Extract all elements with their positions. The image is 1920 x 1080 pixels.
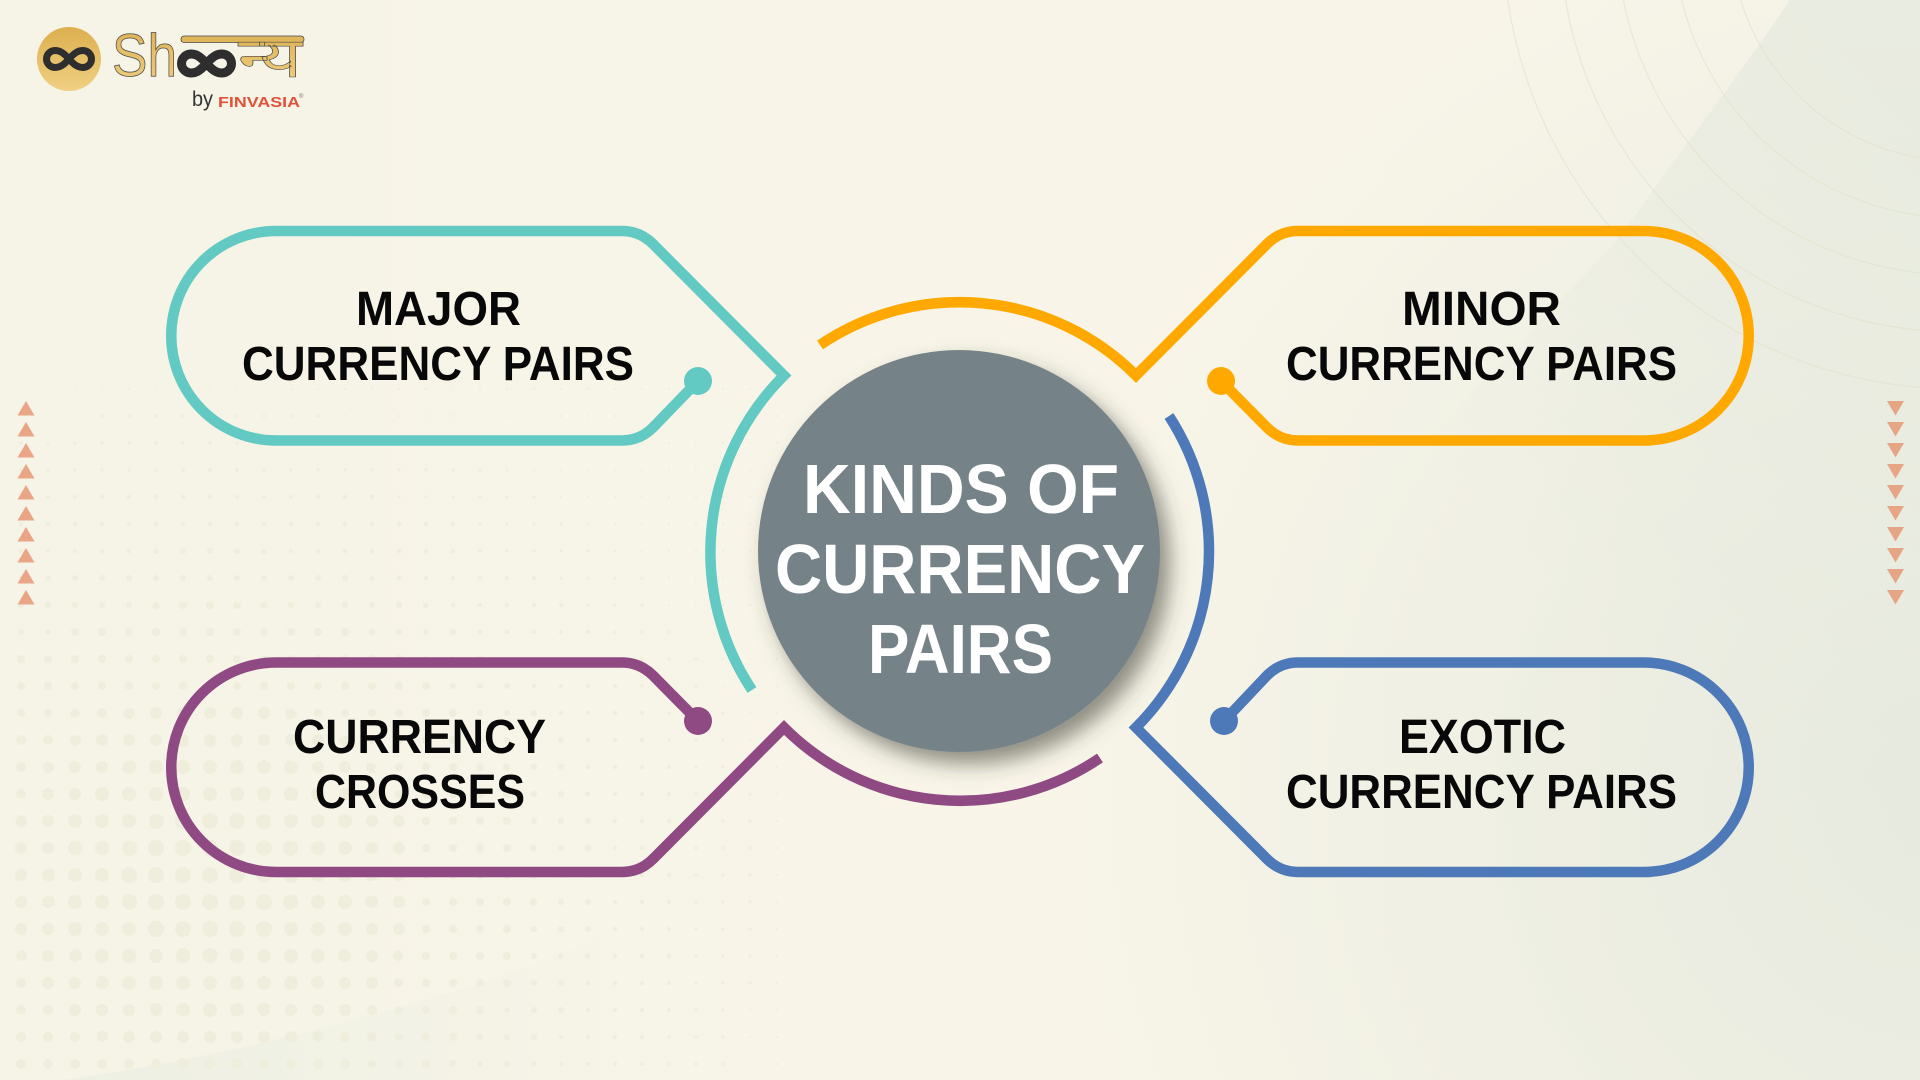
icon: gold infinity badge: [37, 27, 101, 91]
orange dot: [1207, 367, 1235, 395]
label: currency crosses: CROSSES: [315, 766, 525, 819]
logo wordmark: Sh: [112, 22, 177, 89]
central title: KINDS OF: [803, 450, 1119, 528]
central title: CURRENCY: [775, 530, 1145, 608]
purple outline: [171, 662, 1100, 872]
label: major currency pairs: CURRENCY PAIRS: [242, 338, 634, 391]
central title: [775, 450, 1145, 688]
label: minor currency pairs: CURRENCY PAIRS: [1286, 338, 1677, 391]
blue dot: [1210, 707, 1238, 735]
decoration: right triangles pointing down: [1887, 401, 1904, 604]
label: exotic currency pairs: EXOTIC: [1399, 711, 1566, 764]
blue outline: [1136, 416, 1749, 872]
panel: major currency pairs: [171, 231, 784, 690]
logo wordmark: [112, 22, 304, 89]
logo tagline: FINVASIA: [218, 94, 300, 111]
label: exotic currency pairs: [1286, 711, 1677, 819]
label: major currency pairs: MAJOR: [356, 283, 521, 336]
orange outline: [820, 231, 1749, 440]
purple dot: [684, 707, 712, 735]
label: minor currency pairs: MINOR: [1402, 283, 1561, 336]
logo tagline: [192, 88, 304, 111]
logo tagline: ®: [299, 93, 304, 100]
panel: exotic currency pairs: [1136, 416, 1749, 872]
label: exotic currency pairs: CURRENCY PAIRS: [1286, 766, 1677, 819]
teal dot: [684, 367, 712, 395]
label: currency crosses: CURRENCY: [293, 711, 546, 764]
central title: PAIRS: [868, 610, 1053, 688]
logo tagline: by: [192, 88, 213, 111]
central circle: kinds of currency pairs: [758, 350, 1160, 752]
decoration: left triangles pointing up: [18, 401, 34, 604]
label: major currency pairs: [242, 283, 634, 391]
logo: Shoonya by Finvasia: [37, 22, 304, 111]
panel: minor currency pairs: [820, 231, 1749, 440]
teal outline: [171, 231, 784, 690]
panel: currency crosses: [171, 662, 1100, 872]
logo wordmark: न्य: [238, 26, 304, 89]
label: currency crosses: [293, 711, 546, 819]
label: minor currency pairs: [1286, 283, 1677, 391]
